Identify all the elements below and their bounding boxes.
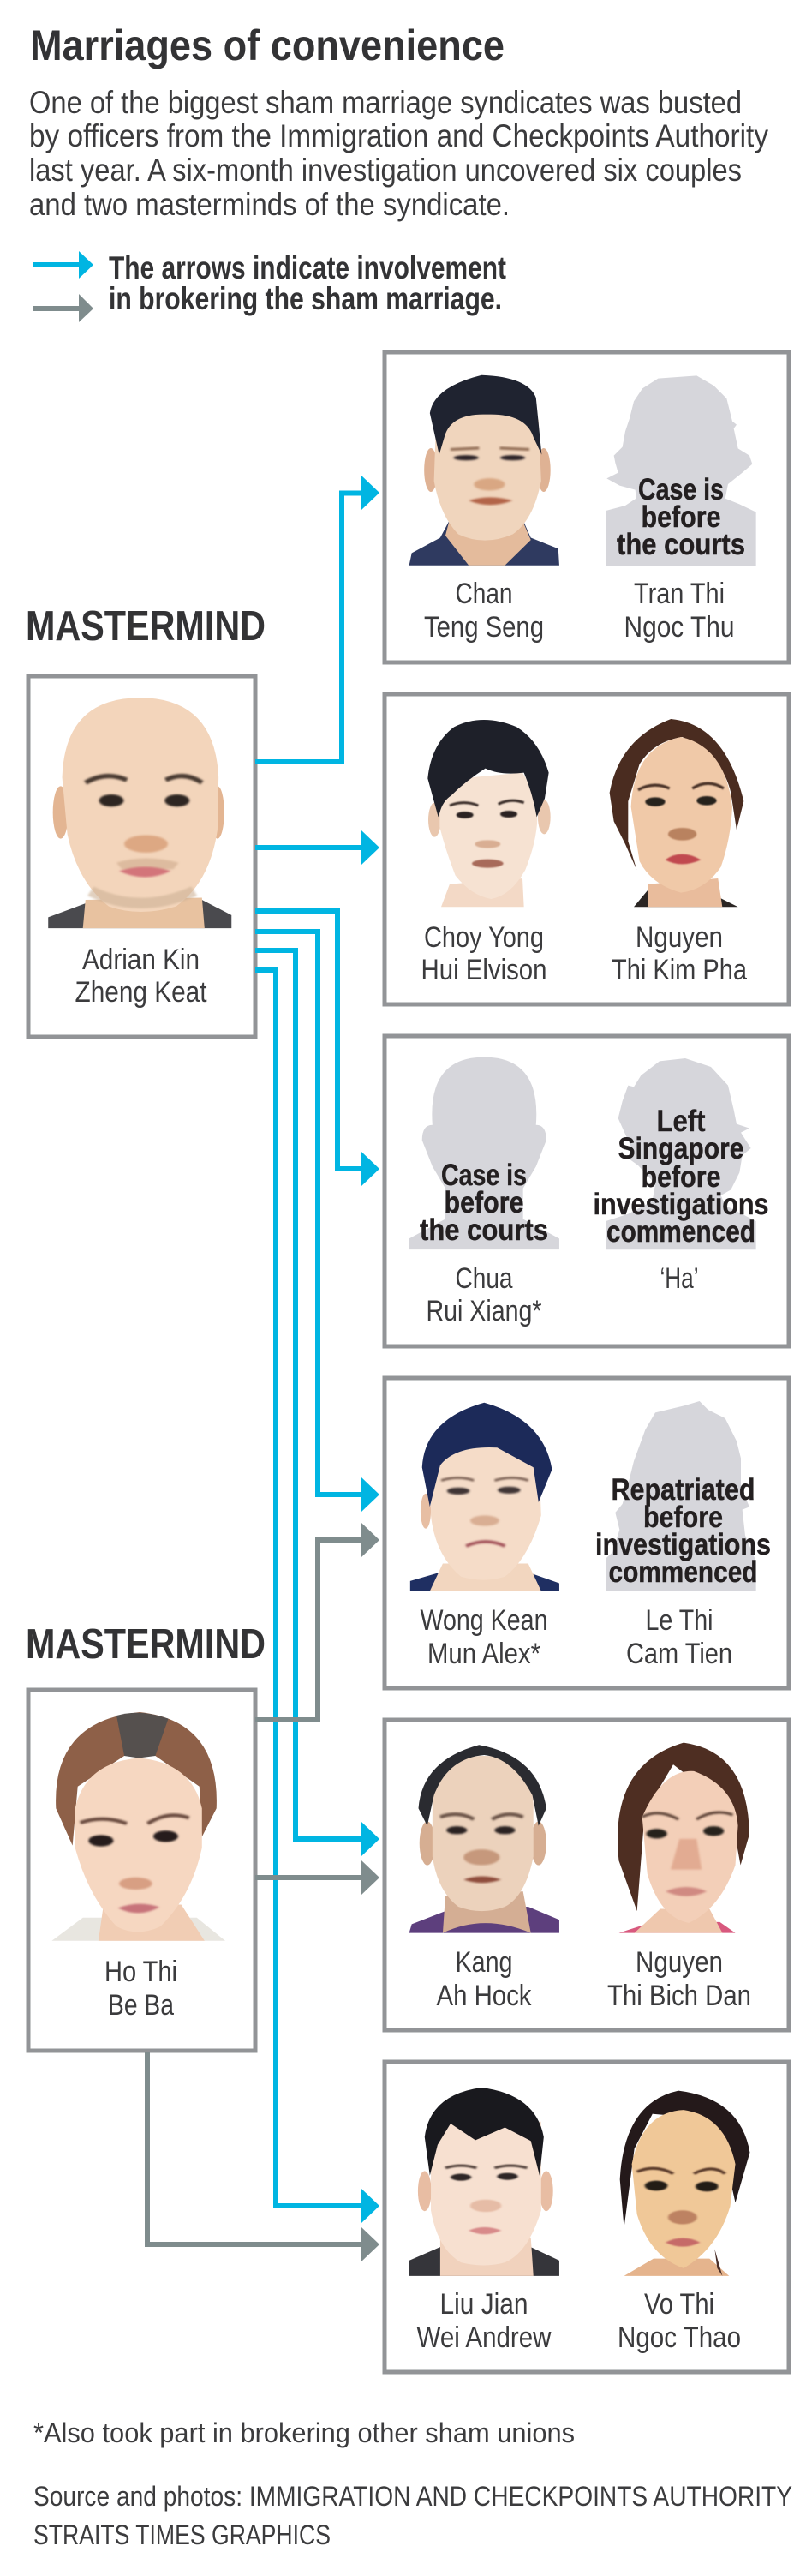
title: Marriages of convenience bbox=[30, 21, 505, 69]
arrow: Adrian to couple 5 bbox=[255, 950, 379, 1856]
name: Chua bbox=[427, 1262, 541, 1327]
arrow: Adrian to couple 4 bbox=[255, 932, 379, 1512]
name: Ho: Ho Thi bbox=[104, 1956, 177, 1988]
photo: Vo Thi Ngoc Thao bbox=[620, 2091, 749, 2276]
name: Le: Cam Tien bbox=[626, 1638, 732, 1670]
legend text bbox=[109, 250, 506, 316]
name: Vo: Ngoc Thao bbox=[618, 2321, 741, 2354]
name: Ho: Be Ba bbox=[108, 1989, 174, 2022]
photo: Ho Thi Be Ba bbox=[51, 1712, 225, 1941]
intro text: and two masterminds of the syndicate. bbox=[29, 187, 510, 222]
name: Adrian: Adrian Kin bbox=[82, 944, 200, 976]
name: Liu: Wei Andrew bbox=[416, 2321, 552, 2354]
status: Le: Repatriated bbox=[612, 1473, 755, 1507]
name: Wong: Wong Kean bbox=[420, 1604, 548, 1637]
heading: mastermind 2: MASTERMIND bbox=[26, 1621, 266, 1668]
silhouette: Tran Thi Ngoc Thu bbox=[606, 375, 756, 566]
legend text: The arrows indicate involvement bbox=[109, 250, 506, 285]
photo: Choy Yong Hui Elvison bbox=[427, 720, 551, 907]
name: Nguyen Kim Pha: Thi Kim Pha bbox=[612, 954, 747, 986]
status: Tran: Case is bbox=[638, 473, 724, 506]
name: Choy bbox=[421, 921, 546, 986]
panel: couple 3 bbox=[385, 1036, 789, 1346]
name: Kang bbox=[437, 1946, 532, 2012]
name: Ha: ‘Ha’ bbox=[660, 1262, 699, 1295]
name: Tran: Ngoc Thu bbox=[624, 611, 735, 644]
status: Chua bbox=[420, 1159, 548, 1247]
status: Le: investigations bbox=[595, 1528, 771, 1561]
panel: couple 6 bbox=[385, 2062, 789, 2372]
status: Tran: before bbox=[641, 500, 721, 534]
name: Adrian: Zheng Keat bbox=[75, 976, 207, 1009]
photo: Kang Ah Hock bbox=[409, 1745, 559, 1933]
arrow: Ho to couple 6 bbox=[147, 2052, 379, 2261]
arrow: Adrian to couple 2 bbox=[255, 830, 379, 865]
arrow: Ho to couple 4 bbox=[255, 1523, 379, 1720]
name: Nguyen Bich Dan: Thi Bich Dan bbox=[607, 1980, 751, 2012]
silhouette: Le Thi Cam Tien bbox=[606, 1401, 756, 1591]
name: Nguyen Kim Pha: Nguyen bbox=[636, 921, 723, 954]
status: Chua: Case is bbox=[441, 1159, 527, 1192]
status: Tran bbox=[617, 473, 745, 561]
name: Le bbox=[626, 1604, 732, 1670]
name: Choy: Hui Elvison bbox=[421, 954, 546, 986]
heading: mastermind 1: MASTERMIND bbox=[26, 603, 266, 650]
legend bbox=[33, 250, 506, 322]
arrow: Adrian to couple 3 bbox=[255, 911, 379, 1186]
panel: couple 4 bbox=[385, 1378, 789, 1688]
panel: couple 2 bbox=[385, 694, 789, 1004]
name: Chua: Chua bbox=[456, 1262, 513, 1295]
status: Le bbox=[595, 1473, 771, 1589]
status: Ha: before bbox=[641, 1160, 721, 1194]
status: Ha: commenced bbox=[606, 1215, 755, 1249]
intro text bbox=[29, 85, 768, 222]
status: Le: before bbox=[643, 1501, 723, 1534]
name: Tran bbox=[624, 578, 735, 644]
photo: Wong Kean Mun Alex bbox=[410, 1403, 559, 1591]
name: Kang: Kang bbox=[456, 1946, 512, 1979]
status: Ha: Singapore bbox=[618, 1132, 743, 1165]
arrow: Adrian to couple 1 bbox=[255, 476, 379, 762]
silhouette: Ha bbox=[606, 1058, 756, 1249]
panel: couple 5 bbox=[385, 1720, 789, 2030]
status: Ha: investigations bbox=[593, 1188, 769, 1221]
name: Vo: Vo Thi bbox=[644, 2288, 714, 2321]
name: Nguyen Bich Dan: Nguyen bbox=[636, 1946, 723, 1979]
name: Liu: Liu Jian bbox=[440, 2288, 528, 2321]
name: Le: Le Thi bbox=[646, 1604, 713, 1637]
status: Chua: before bbox=[444, 1186, 524, 1219]
panel: couple 1 bbox=[385, 352, 789, 662]
name: Choy: Choy Yong bbox=[424, 921, 544, 954]
photo: Nguyen Thi Kim Pha bbox=[610, 719, 743, 907]
name: Chan: Chan bbox=[456, 578, 512, 610]
intro text: last year. A six-month investigation uncovered six couples bbox=[29, 153, 742, 188]
photo: Adrian Kin bbox=[48, 698, 231, 928]
photo: Nguyen Thi Bich Dan bbox=[618, 1743, 749, 1933]
name: Wong: Mun Alex* bbox=[427, 1638, 540, 1670]
panel: mastermind Adrian bbox=[28, 676, 255, 1037]
silhouette: Chua Rui Xiang bbox=[409, 1057, 559, 1249]
photo: Chan Teng Seng bbox=[409, 375, 559, 566]
legend text: in brokering the sham marriage. bbox=[109, 281, 502, 316]
status: Tran: the courts bbox=[617, 528, 745, 561]
name: Chan bbox=[424, 578, 544, 644]
name: Nguyen Kim Pha bbox=[612, 921, 747, 986]
icon: blue arrow bbox=[33, 251, 93, 279]
name: Kang: Ah Hock bbox=[437, 1980, 532, 2012]
name: Adrian bbox=[75, 944, 207, 1009]
name: Nguyen Bich Dan bbox=[607, 1946, 751, 2012]
panel: mastermind Ho bbox=[28, 1690, 255, 2051]
name: Vo bbox=[618, 2288, 741, 2354]
name: Chan: Teng Seng bbox=[424, 611, 544, 644]
status: Chua: the courts bbox=[420, 1213, 548, 1247]
footnote: *Also took part in brokering other sham unions bbox=[33, 2417, 575, 2448]
name: Tran: Tran Thi bbox=[634, 578, 725, 610]
source bbox=[33, 2481, 792, 2550]
status: Ha bbox=[593, 1105, 769, 1249]
status: Ha: Left bbox=[656, 1105, 706, 1138]
arrow: Adrian to couple 6 bbox=[255, 970, 379, 2223]
icon: gray arrow bbox=[33, 294, 93, 322]
source: STRAITS TIMES GRAPHICS bbox=[33, 2519, 331, 2550]
name: Chua: Rui Xiang* bbox=[427, 1295, 541, 1327]
status: Le: commenced bbox=[608, 1555, 757, 1589]
name: Liu bbox=[416, 2288, 552, 2354]
photo: Liu Jian Wei Andrew bbox=[409, 2088, 559, 2276]
arrow: Ho to couple 5 bbox=[255, 1860, 379, 1895]
intro text: One of the biggest sham marriage syndicates was busted bbox=[29, 85, 742, 120]
name: Wong bbox=[420, 1604, 548, 1670]
name: Ho bbox=[104, 1956, 177, 2022]
